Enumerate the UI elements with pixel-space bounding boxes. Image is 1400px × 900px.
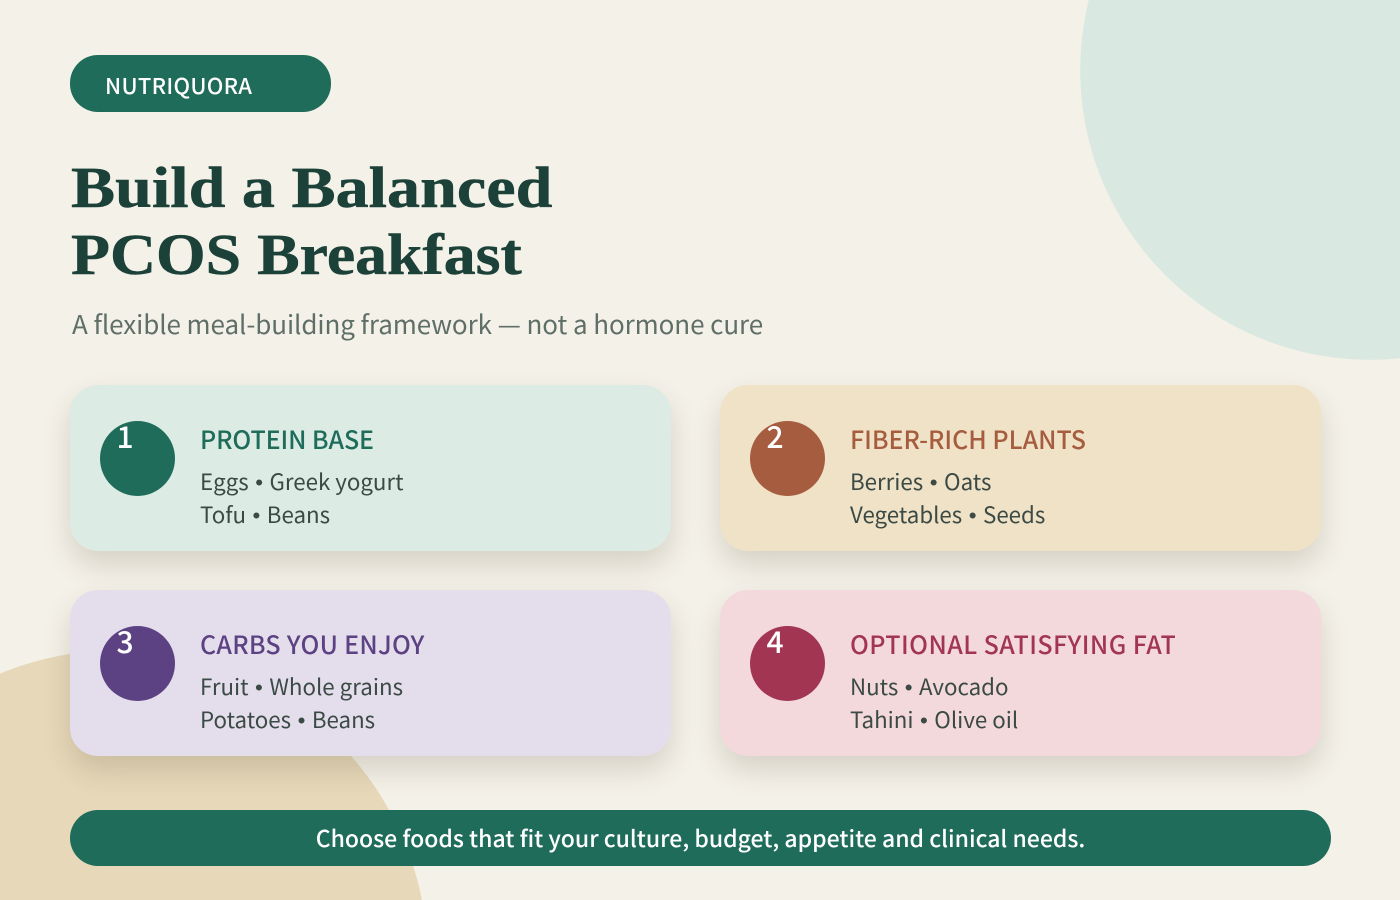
panel: fiber-rich plants (720, 385, 1321, 551)
heading: OPTIONAL SATISFYING FAT (850, 626, 1176, 662)
food list: Berries • Oats (850, 465, 991, 497)
title: PCOS Breakfast (71, 222, 522, 287)
panel: protein base (70, 385, 671, 551)
heading: FIBER-RICH PLANTS (850, 421, 1086, 457)
number badge 2 (750, 421, 825, 496)
number badge 3: 3 (116, 618, 134, 662)
heading: PROTEIN BASE (200, 421, 374, 457)
number badge 4 (750, 626, 825, 701)
number badge 3 (100, 626, 175, 701)
decorative circle: bottom left (0, 650, 430, 900)
number badge 4: 4 (766, 618, 784, 662)
food list: Tahini • Olive oil (850, 703, 1018, 735)
panel: carbs you enjoy (70, 590, 671, 756)
food list: Nuts • Avocado (850, 670, 1008, 702)
footer banner (70, 810, 1331, 866)
title (71, 155, 552, 287)
food list: Eggs • Greek yogurt (200, 465, 404, 497)
decorative circle: top right (1080, 0, 1400, 360)
heading: CARBS YOU ENJOY (200, 626, 425, 662)
footer banner: Choose foods that fit your culture, budget, appetite and clinical needs. (316, 820, 1085, 854)
food list (850, 670, 1018, 735)
food list: Tofu • Beans (200, 498, 330, 530)
number badge 2: 2 (766, 413, 784, 457)
brand pill (70, 55, 331, 112)
brand name: NUTRIQUORA (105, 69, 252, 101)
title: Build a Balanced (71, 155, 552, 220)
panel: optional satisfying fat (720, 590, 1321, 756)
food list (850, 465, 1045, 530)
food list: Vegetables • Seeds (850, 498, 1045, 530)
number badge 1: 1 (116, 413, 134, 457)
food list: Potatoes • Beans (200, 703, 375, 735)
food list: Fruit • Whole grains (200, 670, 403, 702)
number badge 1 (100, 421, 175, 496)
food list (200, 465, 404, 530)
subtitle: A flexible meal-building framework — not a hormone cure (72, 305, 763, 342)
food list (200, 670, 403, 735)
